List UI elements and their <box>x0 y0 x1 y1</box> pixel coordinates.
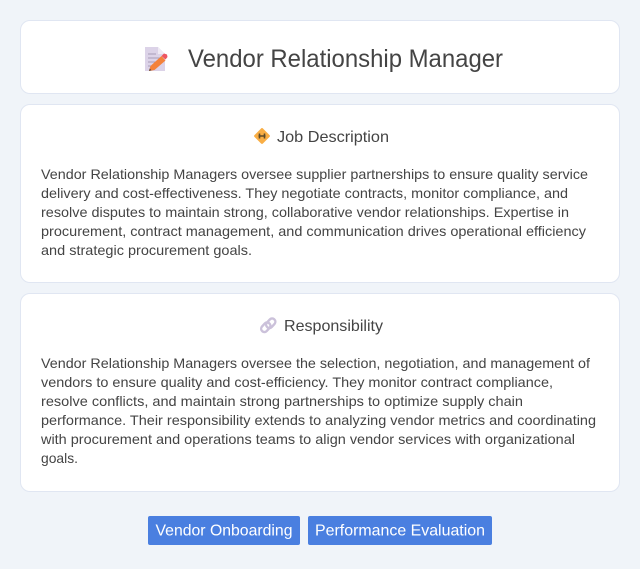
text: job description body: and strategic procurement goals. <box>41 242 252 258</box>
text: responsibility body: vendors to ensure quality and cost-efficiency. They monitor contract compliance, <box>41 374 553 390</box>
text: responsibility body: Vendor Relationship Managers oversee the selection, negotiation, and management of <box>41 355 590 371</box>
icon: document with pencil <box>145 47 168 71</box>
icon: job description diamond <box>254 128 270 144</box>
text: responsibility body: resolve conflicts, and maintain strong partnerships to optimize supply chain <box>41 393 523 409</box>
tag label: performance evaluation: Performance Evaluation <box>315 522 485 540</box>
panel: job description card <box>20 104 620 283</box>
text: responsibility body <box>40 355 596 466</box>
text: responsibility body: goals. <box>41 450 78 466</box>
tag: vendor onboarding background <box>148 516 300 545</box>
tag label: vendor onboarding: Vendor Onboarding <box>156 522 292 540</box>
tag: performance evaluation background <box>308 516 492 545</box>
icon: chain link <box>260 317 277 333</box>
text: job description body: procurement, contract management, and communication drives operational efficiency <box>41 223 586 239</box>
panel: title card <box>20 20 620 94</box>
text: job description body <box>41 166 588 258</box>
panel: responsibility card <box>20 293 620 492</box>
heading: job description: Job Description <box>277 129 389 146</box>
text: job description body: Vendor Relationship Managers oversee supplier partnerships to ensure quality service <box>41 166 588 182</box>
text: job description body: delivery and cost-effectiveness. They negotiate contracts, monitor compliance, and <box>41 185 568 201</box>
heading: responsibility: Responsibility <box>284 318 383 335</box>
text: responsibility body: with procurement and operations teams to align vendor services with organizational <box>40 431 575 447</box>
text: job description body: resolve disputes to maintain strong, collaborative vendor relationships. Expertise in <box>41 204 569 220</box>
title: Vendor Relationship Manager <box>188 45 503 73</box>
text: responsibility body: performance. Their responsibility extends to analyzing vendor metrics and coordinating <box>41 412 596 428</box>
